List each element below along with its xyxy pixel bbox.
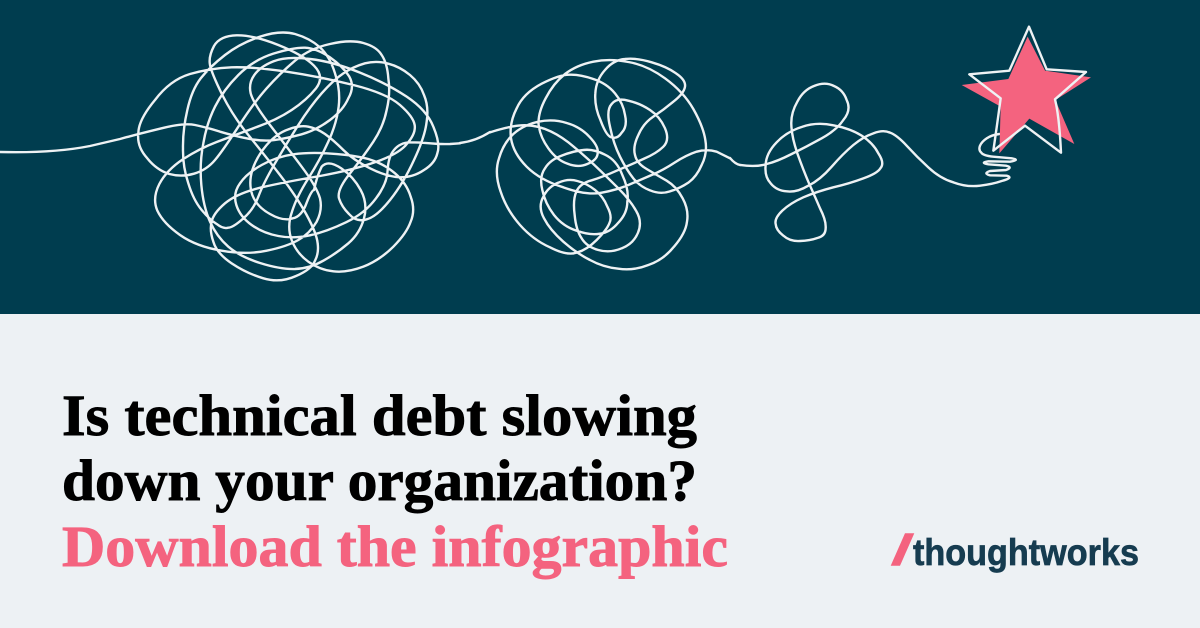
logo: thoughtworks xyxy=(891,532,1139,573)
icon: large tangle xyxy=(0,32,460,280)
star fill xyxy=(962,37,1091,153)
icon: star xyxy=(962,27,1091,153)
star outline xyxy=(969,27,1086,153)
icon: small tangle with line coiling to the star xyxy=(740,84,1016,241)
connector line between large and medium tangles xyxy=(460,132,490,143)
heading line 1: Is technical debt slowing xyxy=(62,383,697,448)
heading line 2: down your organization? xyxy=(62,448,697,513)
heading xyxy=(62,383,728,579)
panel: dark illustration banner xyxy=(0,0,1200,314)
logo wordmark: thoughtworks xyxy=(913,532,1139,573)
illustration: tangled line untangling into a star xyxy=(0,27,1091,280)
heading line 3: call to action: Download the infographic xyxy=(62,514,728,579)
logo slash xyxy=(891,533,914,566)
connector line between medium and small tangles xyxy=(730,158,740,165)
icon: medium tangle xyxy=(490,59,730,269)
